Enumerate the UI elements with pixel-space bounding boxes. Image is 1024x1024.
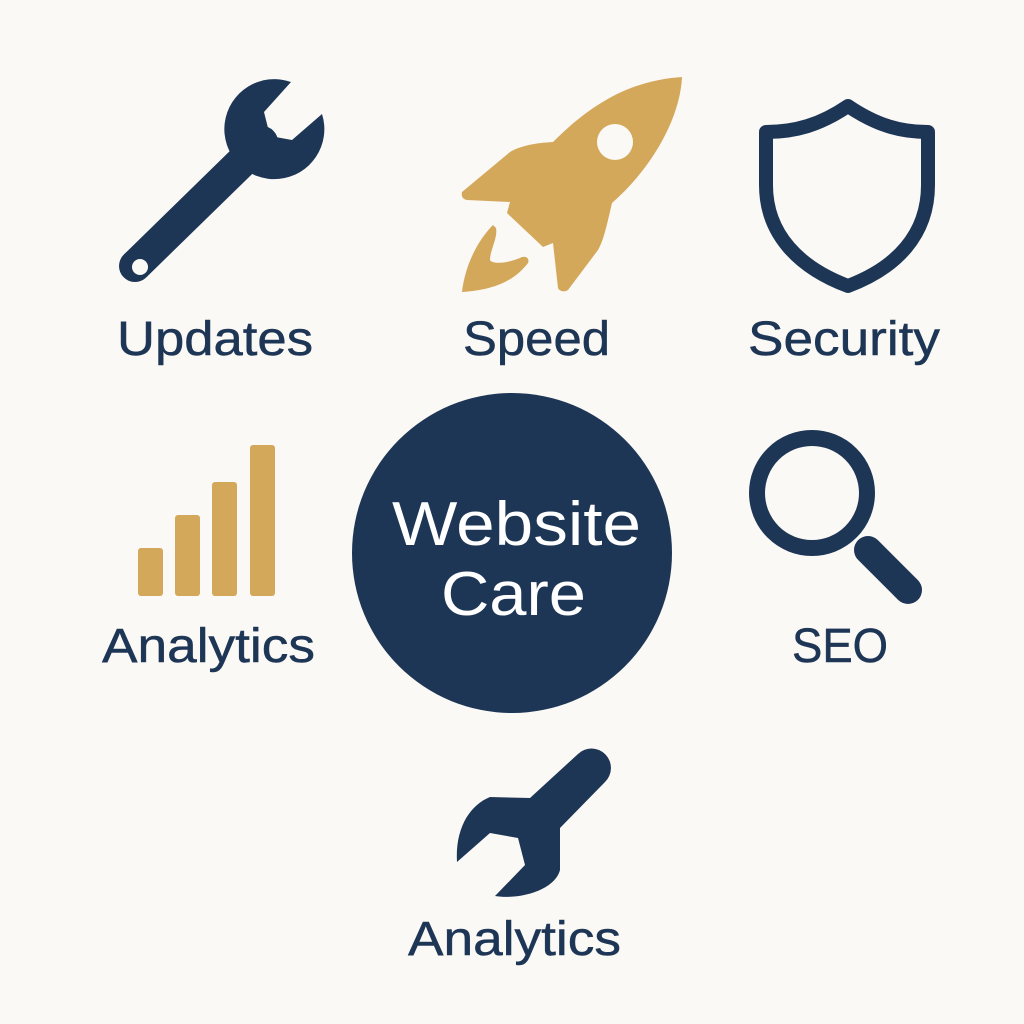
center circle: Website Care bbox=[352, 393, 672, 713]
label: Updates: Updates bbox=[117, 313, 313, 366]
icon: bar chart (analytics) bbox=[138, 445, 275, 596]
label: Analytics (bottom): Analytics bbox=[408, 913, 621, 966]
label: Speed: Speed bbox=[463, 313, 610, 366]
icon: rocket (speed) bbox=[462, 77, 682, 292]
label: Security: Security bbox=[748, 313, 940, 366]
icon: wrench (bottom) bbox=[457, 749, 611, 897]
icon: shield (security) bbox=[766, 106, 928, 286]
icon: wrench (updates) bbox=[132, 79, 324, 275]
center circle: Website Care: Website bbox=[392, 490, 641, 559]
icon: magnifier (SEO) bbox=[757, 438, 908, 590]
label: SEO: SEO bbox=[792, 620, 888, 673]
label: Analytics: Analytics bbox=[102, 620, 315, 673]
center circle: Website Care: Care bbox=[441, 560, 586, 629]
